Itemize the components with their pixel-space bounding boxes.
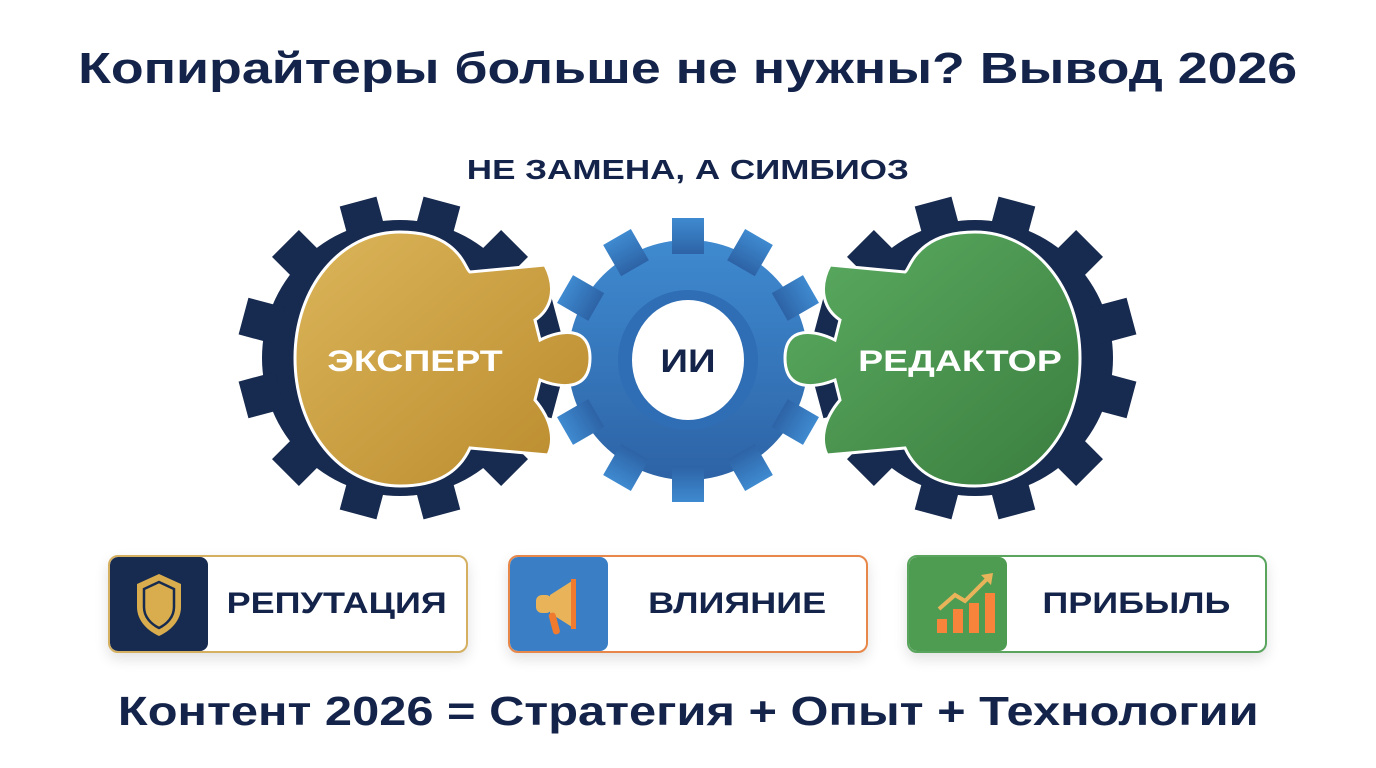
green editor piece: РЕДАКТОР [858,344,1062,378]
ИИ center [632,300,744,420]
right dark gear [814,197,1136,519]
icon: megaphone [510,557,608,651]
card: reputation: РЕПУТАЦИЯ [227,587,447,620]
card: reputation [108,555,468,653]
card: profit: ПРИБЫЛЬ [1042,587,1230,620]
gold expert piece: ЭКСПЕРТ [327,344,503,378]
title: Копирайтеры больше не нужны? Вывод 2026 [78,44,1298,93]
icon: shield [110,557,208,651]
bottom formula: Контент 2026 = Стратегия + Опыт + Технологии [118,688,1258,734]
gold expert piece [295,232,590,486]
subtitle: НЕ ЗАМЕНА, А СИМБИОЗ [467,154,909,185]
card: influence [508,555,868,653]
green editor piece [785,232,1080,486]
blue center gear [546,218,830,502]
left dark gear [239,197,561,519]
card: influence: ВЛИЯНИЕ [648,587,826,620]
icon: growth chart [909,557,1007,651]
card: profit [907,555,1267,653]
ИИ center: ИИ [660,344,716,379]
